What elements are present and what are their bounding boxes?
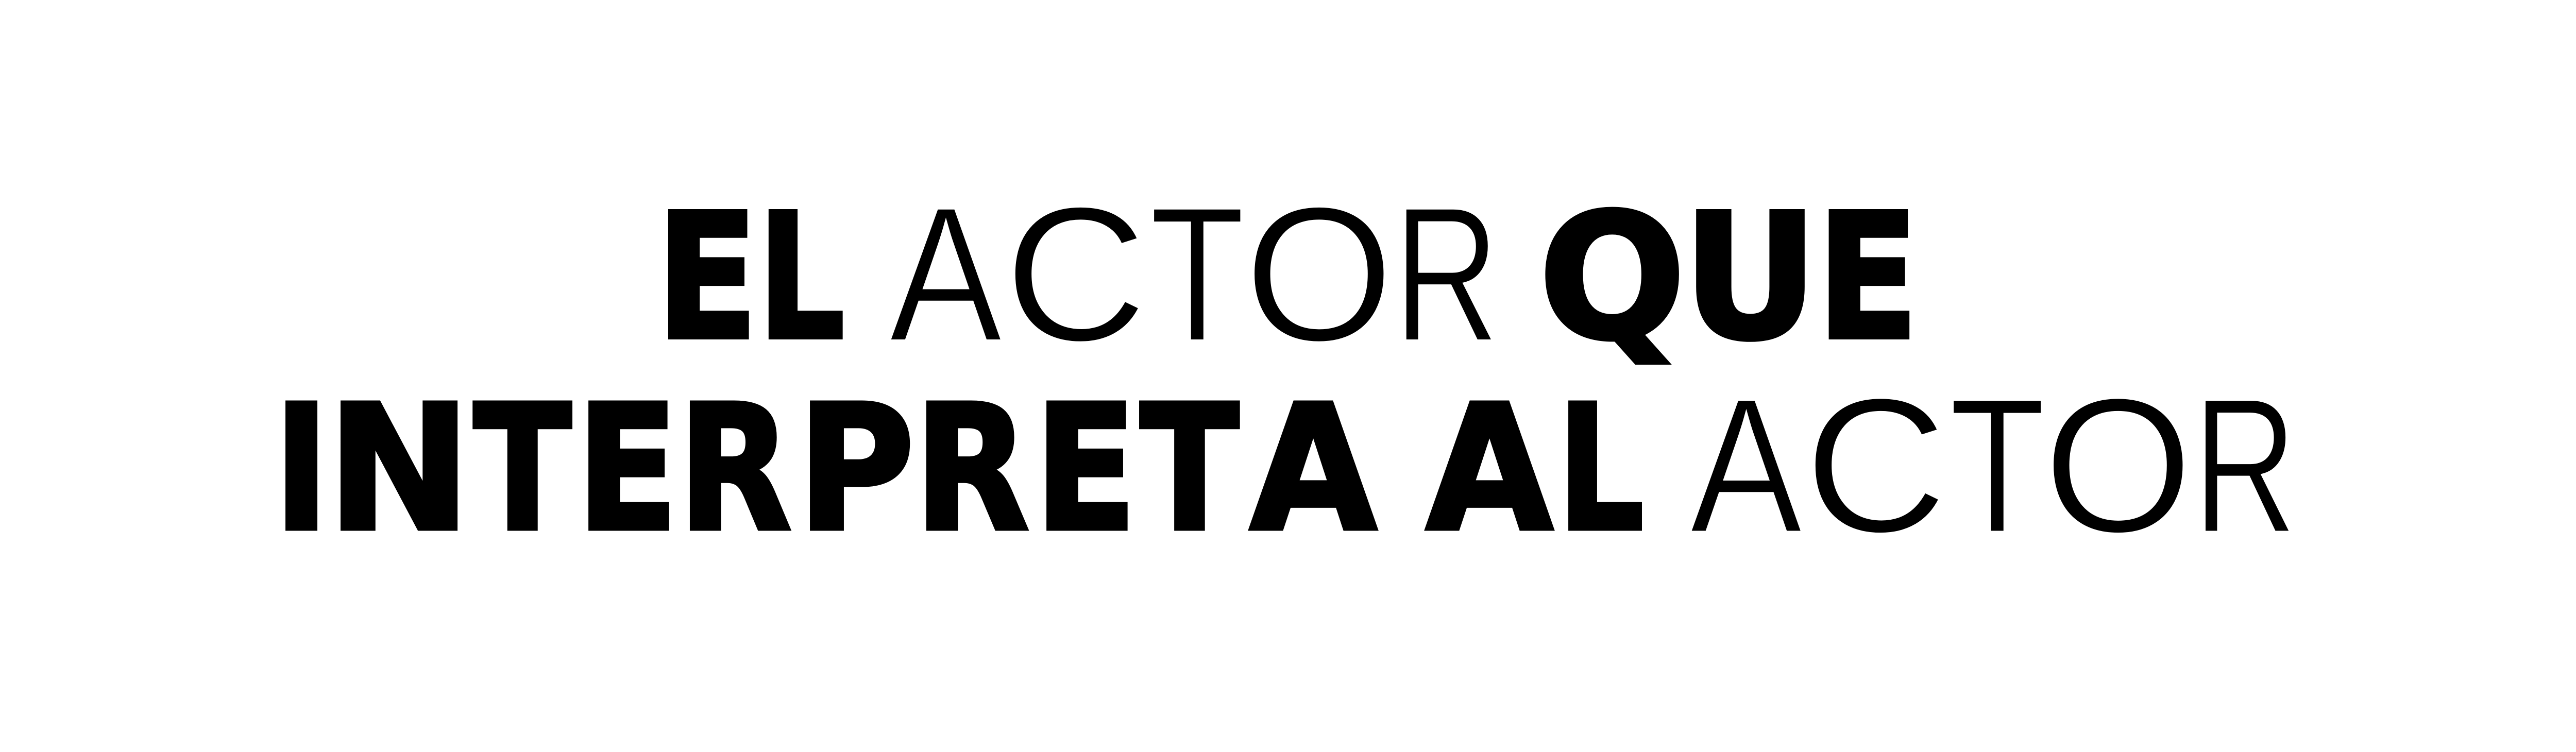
word: QUE (bold): E xyxy=(1817,177,1919,378)
heading line 1: EL ACTOR QUE xyxy=(656,166,1919,382)
word: INTERPRETA (bold): P xyxy=(797,368,914,570)
word: INTERPRETA (bold) xyxy=(274,368,1378,570)
word: ACTOR (light): R xyxy=(1393,166,1500,382)
word: ACTOR (light): A xyxy=(889,166,1003,382)
word: AL (bold) xyxy=(1426,368,1644,570)
word: QUE (bold) xyxy=(1539,177,1919,379)
word: EL (bold): E xyxy=(656,177,758,378)
word: INTERPRETA (bold): I xyxy=(274,369,329,570)
word: ACTOR (light): T xyxy=(1949,358,2045,573)
word: ACTOR (light): A xyxy=(1690,358,1803,573)
word: ACTOR (light): O xyxy=(2043,358,2193,573)
word: EL (bold) xyxy=(656,177,845,379)
title xyxy=(274,166,2297,573)
word: INTERPRETA (bold): T xyxy=(473,368,572,570)
word: INTERPRETA (bold): R xyxy=(678,368,792,570)
word: AL (bold): L xyxy=(1557,369,1644,570)
word: ACTOR (light) xyxy=(1690,358,2297,573)
word: INTERPRETA (bold): R xyxy=(914,368,1029,570)
word: AL (bold): A xyxy=(1426,368,1554,570)
word: ACTOR (light): O xyxy=(1244,167,1394,382)
word: EL (bold): L xyxy=(758,177,845,379)
heading line 2: INTERPRETA AL ACTOR xyxy=(274,358,2297,573)
word: ACTOR (light): R xyxy=(2193,358,2297,573)
word: INTERPRETA (bold): N xyxy=(327,368,471,570)
word: INTERPRETA (bold): E xyxy=(1035,368,1137,570)
word: INTERPRETA (bold): A xyxy=(1250,368,1378,570)
word: ACTOR (light): T xyxy=(1149,167,1245,382)
word: QUE (bold): U xyxy=(1683,177,1818,379)
word: ACTOR (light) xyxy=(889,166,1500,382)
word: INTERPRETA (bold): T xyxy=(1140,368,1240,570)
word: INTERPRETA (bold): E xyxy=(577,368,678,570)
word: ACTOR (light): C xyxy=(1004,167,1147,382)
word: ACTOR (light): C xyxy=(1804,358,1947,573)
word: QUE (bold): Q xyxy=(1539,177,1686,379)
